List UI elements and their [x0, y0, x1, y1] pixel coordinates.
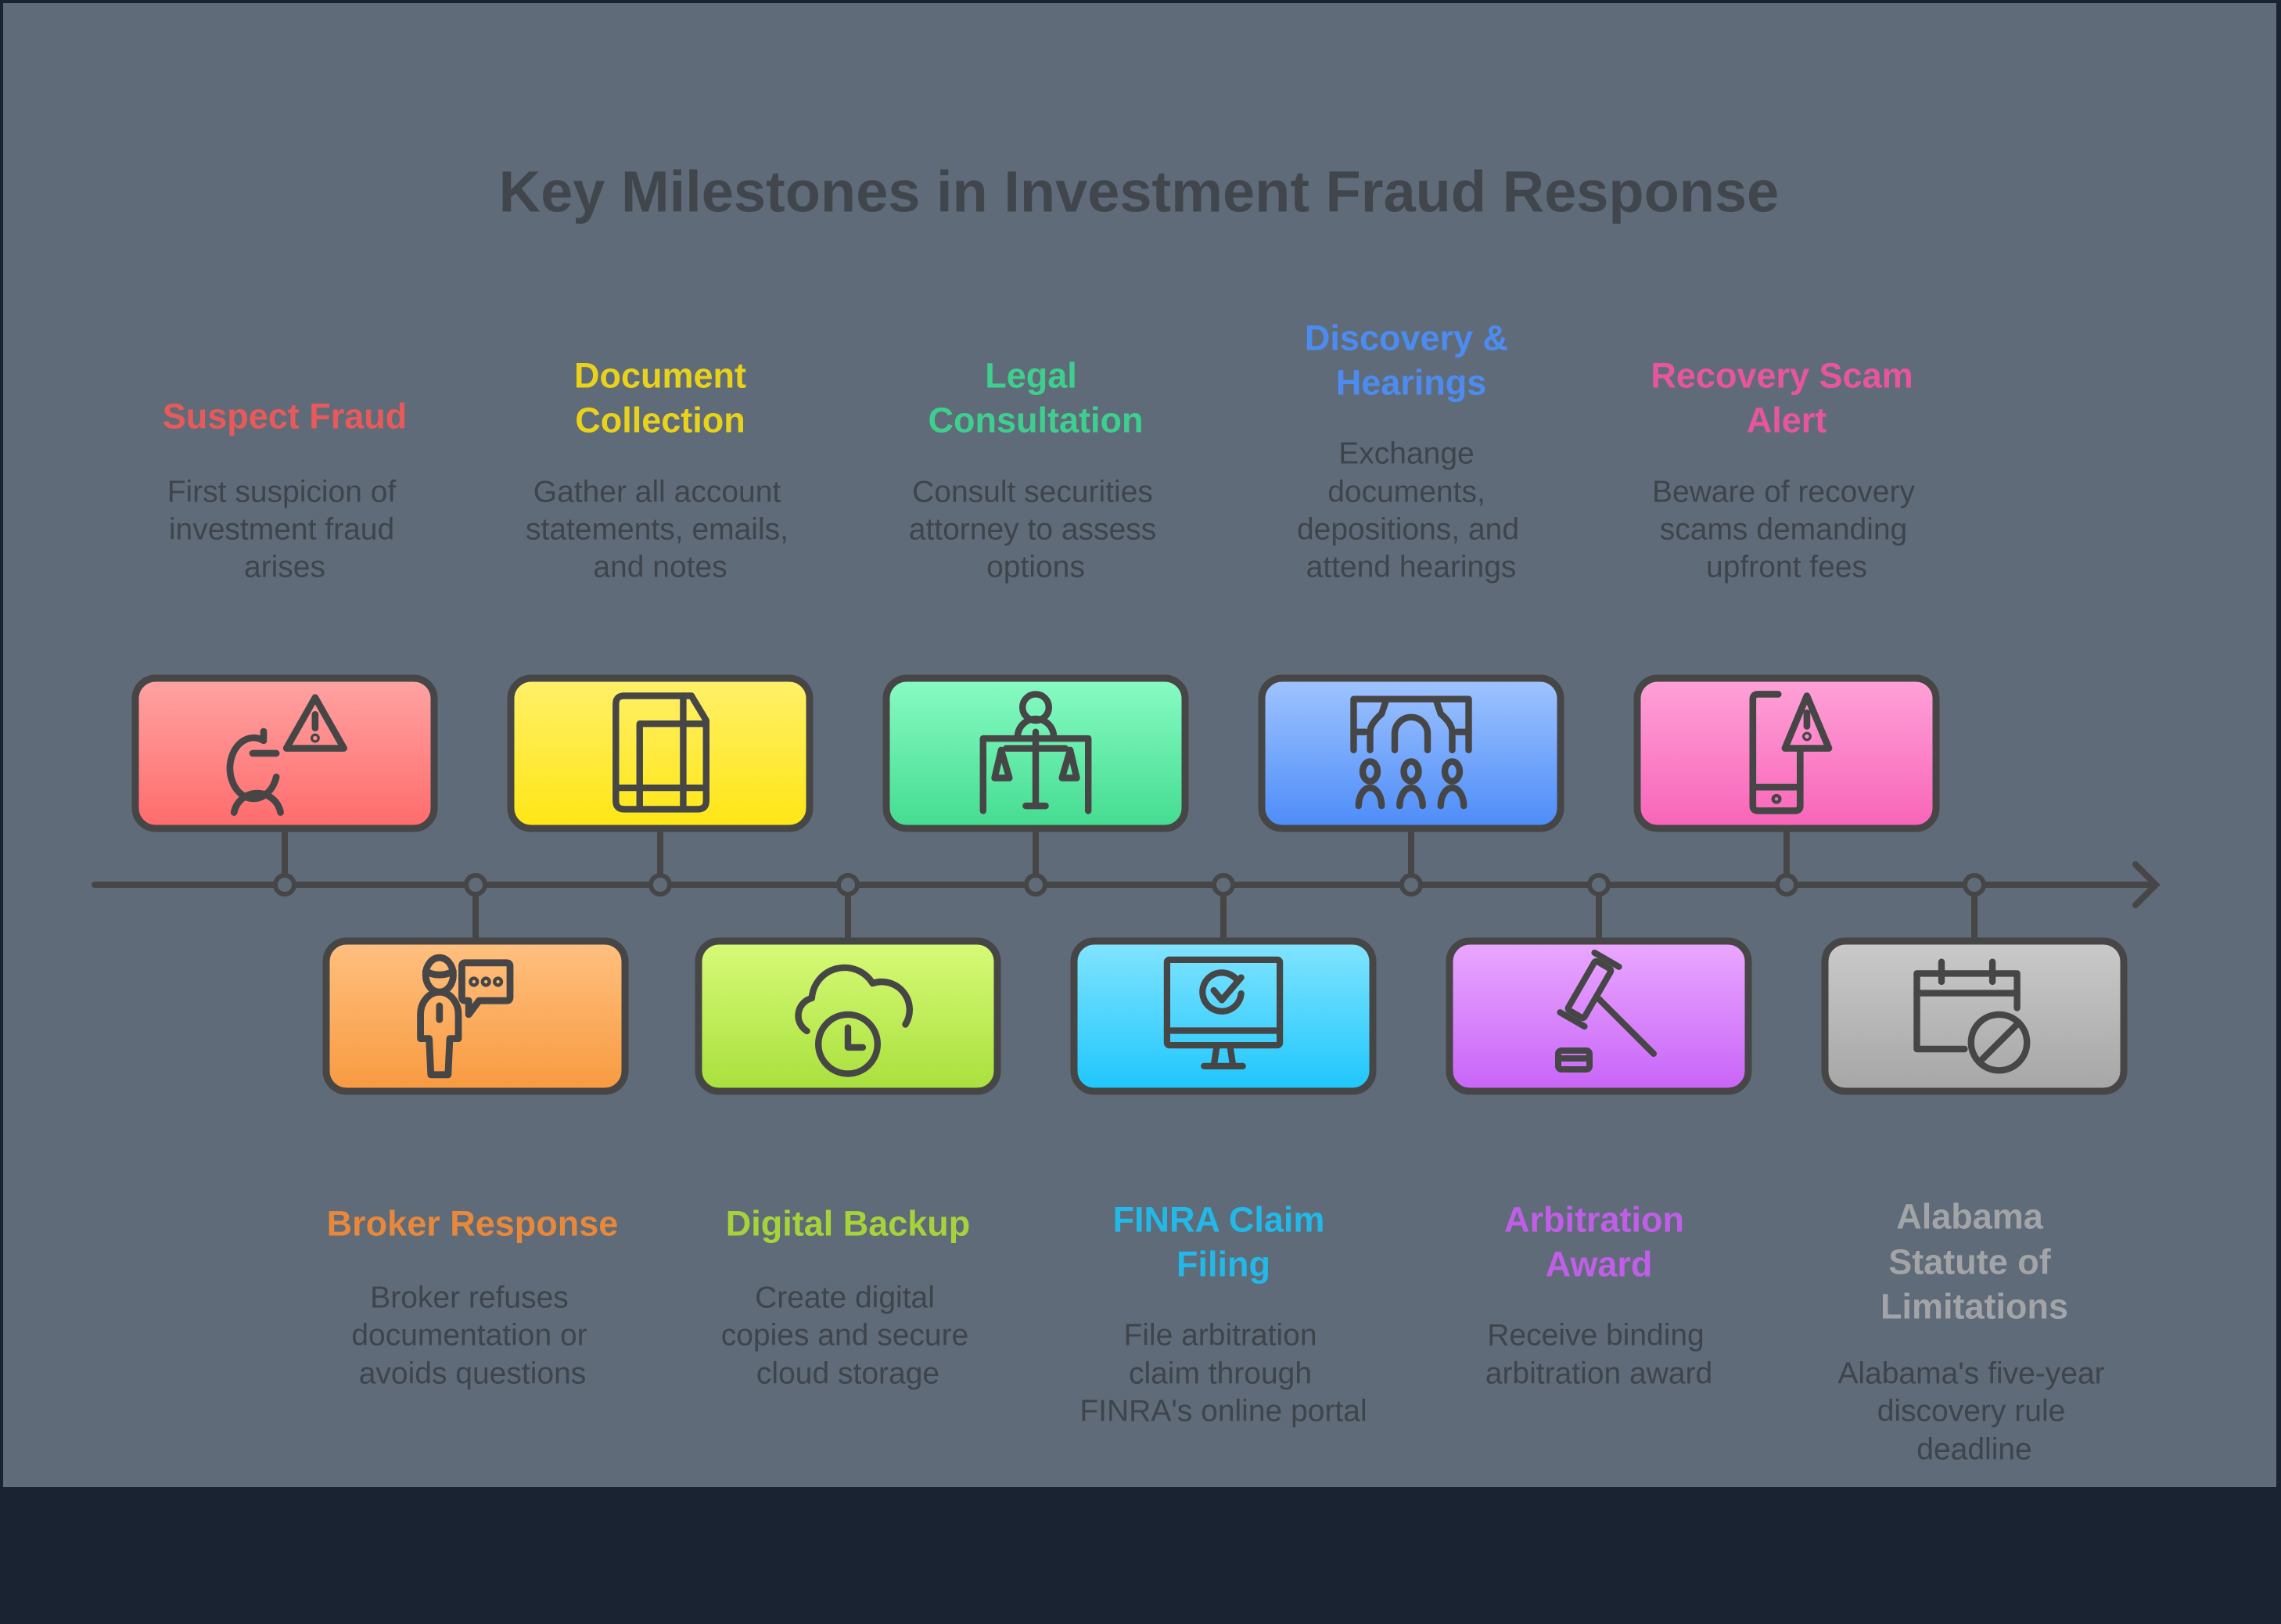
- text: discovery & hearings: Hearings: [1336, 363, 1486, 402]
- milestone: Broker Response: [326, 941, 625, 1391]
- text: digital backup: [721, 1203, 970, 1391]
- milestone: Legal Consultation: [886, 355, 1185, 828]
- text: document collection: and notes: [593, 551, 727, 584]
- text: broker response: [327, 1203, 618, 1391]
- text: alabama statute: deadline: [1916, 1433, 2032, 1466]
- timeline arrow: [95, 829, 2156, 941]
- text: legal consultation: Legal: [985, 355, 1077, 396]
- text: broker response: Broker refuses: [370, 1281, 569, 1314]
- text: suspect fraud: Suspect Fraud: [163, 396, 407, 437]
- text: digital backup: cloud storage: [756, 1356, 939, 1391]
- box: cloud clock icon: [699, 941, 997, 1091]
- milestone: Alabama Statute of Limitations: [1825, 941, 2124, 1466]
- text: legal consultation: attorney to assess: [909, 513, 1156, 546]
- text: finra claim filing: File arbitration: [1123, 1319, 1317, 1352]
- box: legal icon: [886, 678, 1185, 828]
- text: suspect fraud: First suspicion of: [167, 476, 396, 508]
- text: alabama statute: [1837, 1197, 2105, 1466]
- text: discovery & hearings: Discovery &: [1305, 318, 1508, 358]
- text: alabama statute: discovery rule: [1877, 1394, 2065, 1428]
- box: broker icon: [326, 941, 625, 1091]
- text: discovery & hearings: documents,: [1327, 476, 1485, 508]
- text: document collection: Gather all account: [533, 476, 781, 508]
- text: arbitration award: [1485, 1200, 1712, 1391]
- title: Key Milestones in Investment Fraud Response: [499, 160, 1779, 224]
- text: legal consultation: options: [986, 551, 1085, 584]
- box: monitor check icon: [1074, 941, 1373, 1091]
- text: document collection: statements, emails,: [526, 513, 788, 546]
- text: alabama statute: Limitations: [1880, 1286, 2068, 1327]
- text: recovery scam alert: Recovery Scam: [1651, 355, 1913, 396]
- text: discovery & hearings: depositions, and: [1297, 513, 1519, 546]
- box: document icon: [511, 678, 810, 828]
- text: finra claim filing: Filing: [1176, 1244, 1270, 1284]
- text: arbitration award: arbitration award: [1485, 1356, 1712, 1391]
- text: legal consultation: Consult securities: [912, 476, 1153, 508]
- text: finra claim filing: FINRA Claim: [1113, 1200, 1324, 1239]
- text: digital backup: Digital Backup: [726, 1203, 970, 1244]
- text: suspect fraud: investment fraud: [169, 513, 394, 546]
- box: suspect fraud icon: [135, 678, 434, 828]
- text: broker response: Broker Response: [327, 1203, 618, 1244]
- text: suspect fraud: arises: [244, 551, 325, 584]
- milestone: Recovery Scam Alert: [1637, 355, 1936, 828]
- milestone: Suspect Fraud: [135, 396, 434, 828]
- milestone: Document Collection: [511, 355, 810, 828]
- text: alabama statute: Alabama: [1896, 1197, 2044, 1236]
- text: legal consultation: [909, 355, 1156, 584]
- box: phone warning icon: [1637, 678, 1936, 828]
- text: digital backup: Create digital: [755, 1281, 935, 1314]
- text: recovery scam alert: Alert: [1747, 401, 1827, 440]
- text: finra claim filing: FINRA's online portal: [1079, 1394, 1367, 1428]
- milestone: FINRA Claim Filing: [1074, 941, 1373, 1428]
- text: recovery scam alert: scams demanding: [1660, 513, 1907, 546]
- text: document collection: [526, 355, 788, 584]
- text: arbitration award: Arbitration: [1504, 1200, 1684, 1239]
- text: broker response: avoids questions: [359, 1356, 586, 1391]
- text: recovery scam alert: [1651, 355, 1915, 584]
- text: arbitration award: Award: [1546, 1244, 1652, 1284]
- box: hearings icon: [1262, 678, 1561, 828]
- text: discovery & hearings: [1297, 318, 1519, 584]
- text: alabama statute: Statute of: [1888, 1242, 2052, 1281]
- text: discovery & hearings: attend hearings: [1306, 551, 1516, 584]
- text: recovery scam alert: Beware of recovery: [1652, 476, 1915, 508]
- box: calendar icon: [1825, 941, 2124, 1091]
- text: alabama statute: Alabama's five-year: [1837, 1356, 2105, 1391]
- box: gavel icon: [1449, 941, 1748, 1091]
- milestone: Digital Backup: [699, 941, 997, 1391]
- text: discovery & hearings: Exchange: [1338, 437, 1475, 471]
- text: suspect fraud: [163, 396, 407, 584]
- text: arbitration award: Receive binding: [1487, 1319, 1704, 1352]
- text: broker response: documentation or: [351, 1319, 587, 1352]
- text: legal consultation: Consultation: [929, 401, 1143, 440]
- text: finra claim filing: claim through: [1129, 1356, 1312, 1391]
- text: finra claim filing: [1079, 1200, 1367, 1428]
- text: document collection: Collection: [575, 401, 745, 440]
- milestone: Discovery & Hearings: [1262, 318, 1561, 828]
- text: digital backup: copies and secure: [721, 1319, 968, 1352]
- text: document collection: Document: [574, 355, 746, 396]
- milestone: Arbitration Award: [1449, 941, 1748, 1391]
- text: recovery scam alert: upfront fees: [1706, 551, 1867, 584]
